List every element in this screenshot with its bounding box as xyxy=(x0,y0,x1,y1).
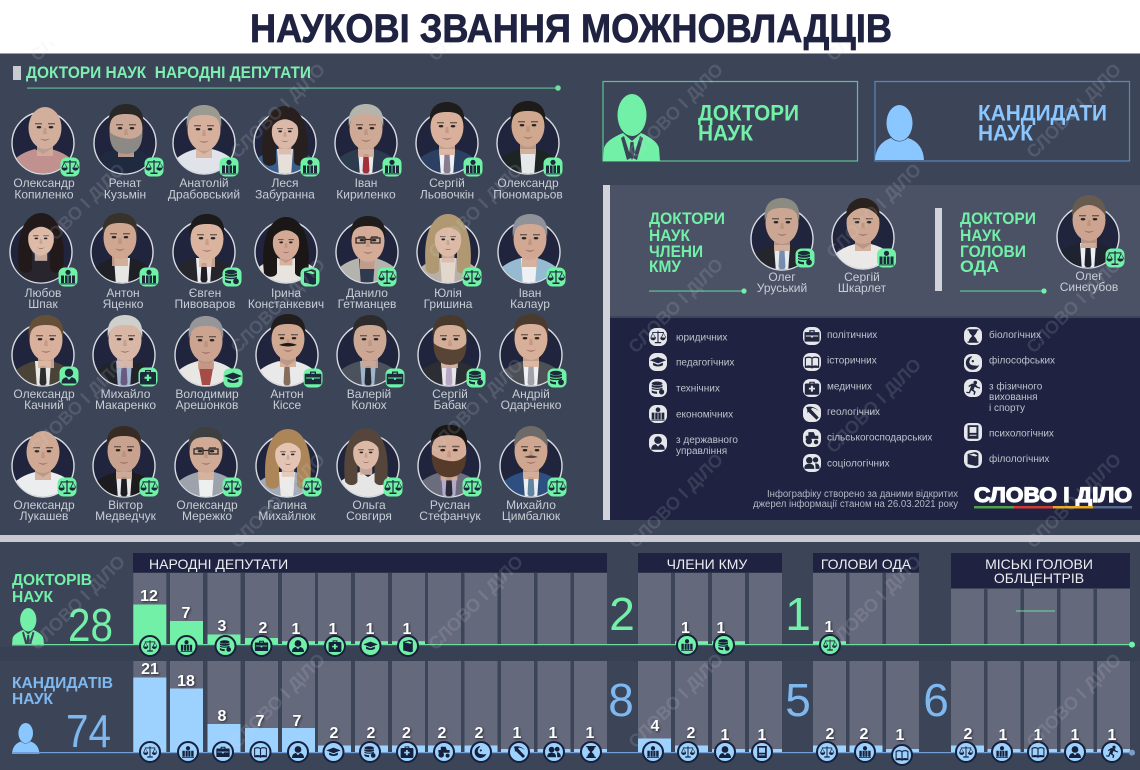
portrait: Совгиря: Ольга xyxy=(352,498,386,512)
heading: доктори наук члени КМУ: ЧЛЕНИ xyxy=(649,242,703,261)
watermarks: СЛОВО І ДІЛО xyxy=(1022,254,1125,357)
portrait: Драбовський xyxy=(168,105,240,202)
green value labels: 1 xyxy=(825,619,834,636)
blue value labels: 1 xyxy=(1108,727,1117,744)
portrait: Уруський: Уруський xyxy=(757,281,807,295)
legend column 3: біологічних xyxy=(989,329,1041,341)
portrait: Совгиря: Совгиря xyxy=(346,509,392,523)
legend column 3: філософських xyxy=(989,354,1055,366)
heading: доктори наук голови ОДА: ДОКТОРИ xyxy=(960,209,1036,228)
portrait: Яценко xyxy=(89,213,158,311)
legend column 2: соціологічних xyxy=(827,458,890,470)
portrait: Забуранна: Леся xyxy=(271,176,299,190)
source note: Інфографіку створено за даними відкритих xyxy=(767,488,958,500)
green value labels: 1 xyxy=(681,620,690,637)
portraits grid: народні депутати xyxy=(8,101,566,523)
portrait: Качний: Олександр xyxy=(13,387,75,401)
watermarks: СЛОВО І ДІЛО xyxy=(424,551,527,654)
chart headers: ГОЛОВИ ОДА xyxy=(821,556,912,572)
portrait: Драбовський: Анатолій xyxy=(179,176,229,190)
legend column 2: політичних xyxy=(827,330,877,341)
portrait: Пономарьов: Олександр xyxy=(497,176,559,190)
blue value labels: 21 xyxy=(141,661,159,678)
portrait: Одарченко: Одарченко xyxy=(501,398,562,412)
blue value labels xyxy=(141,661,1117,744)
watermarks: СЛОВО І ДІЛО xyxy=(226,59,329,162)
portrait: Шпак: Любов xyxy=(25,286,61,300)
green value labels: 12 xyxy=(140,588,158,605)
portrait: Медведчук: Віктор xyxy=(108,498,143,512)
blue icons xyxy=(140,742,1122,765)
watermarks: СЛОВО І ДІЛО xyxy=(226,649,329,752)
blue value labels: 7 xyxy=(256,713,265,730)
watermarks: СЛОВО І ДІЛО xyxy=(1022,59,1125,162)
portrait: Кіссе xyxy=(254,314,322,412)
blue value labels: 2 xyxy=(964,726,973,743)
blue value labels: 2 xyxy=(402,725,411,742)
portrait: Уруський: Олег xyxy=(768,270,796,284)
legend column 1: економічних xyxy=(676,410,733,420)
heading: доктори наук голови ОДА xyxy=(960,209,1036,276)
heading: доктори наук члени КМУ: ДОКТОРИ xyxy=(649,209,725,228)
portrait: Гришина: Юлія xyxy=(434,286,462,300)
portrait: Макаренко: Макаренко xyxy=(95,398,156,412)
totals: 8, 5 and 6: 8 xyxy=(608,674,634,726)
legend column 3 xyxy=(964,327,1055,468)
legend column 3: з фізичного xyxy=(989,380,1043,392)
heading: доктори наук голови ОДА: НАУК xyxy=(960,226,1002,245)
card: доктори наук: НАУК xyxy=(698,120,754,146)
totals: 2 and 1 xyxy=(609,588,811,640)
green value labels: 3 xyxy=(218,618,227,635)
green value labels: 2 xyxy=(259,620,268,637)
blue value labels: 1 xyxy=(758,727,767,744)
portrait: Колюх: Валерій xyxy=(347,387,391,401)
portrait: Льовочкін: Льовочкін xyxy=(420,188,474,202)
watermarks: СЛОВО І ДІЛО xyxy=(26,551,129,654)
heading: доктори наук члени КМУ: НАУК xyxy=(649,226,691,245)
portrait: Михайлюк xyxy=(254,429,322,523)
portrait: Колюх: Колюх xyxy=(351,398,387,412)
green value labels: 1 xyxy=(717,620,726,637)
chart headers xyxy=(133,553,1130,588)
portrait: Гришина: Гришина xyxy=(424,297,473,311)
chart: доктори наук, значення xyxy=(12,588,1135,656)
row label: кандидатів наук 74: НАУК xyxy=(12,691,53,708)
row label: докторів наук 28: ДОКТОРІВ xyxy=(12,572,92,589)
portrait: Гетманцев xyxy=(334,216,400,311)
portrait: Яценко: Яценко xyxy=(103,297,144,311)
portrait: Медведчук xyxy=(91,426,158,523)
watermarks: СЛОВО І ДІЛО xyxy=(624,59,727,162)
portrait: Гетманцев: Гетманцев xyxy=(338,297,396,311)
portrait: Мережко xyxy=(173,427,242,523)
row label: докторів наук 28 xyxy=(12,572,113,651)
portrait: Арешонков xyxy=(173,316,242,412)
portrait: Михайлюк: Михайлюк xyxy=(258,509,316,523)
title: НАУКОВІ ЗВАННЯ МОЖНОВЛАДЦІВ xyxy=(250,7,892,51)
totals: 8, 5 and 6: 6 xyxy=(923,674,949,726)
portrait: Мережко: Олександр xyxy=(176,498,238,512)
heading: доктори наук члени КМУ: КМУ xyxy=(649,257,681,276)
watermarks: СЛОВО І ДІЛО xyxy=(226,254,329,357)
logo: Слово і Діло: СЛОВО І ДІЛО xyxy=(974,484,1132,507)
portrait: Забуранна xyxy=(252,106,320,202)
green icons xyxy=(140,635,840,656)
chart headers: МІСЬКІ ГОЛОВИ xyxy=(985,556,1093,572)
portrait: Констанкевич: Констанкевич xyxy=(248,297,324,311)
portrait: Забуранна: Забуранна xyxy=(255,188,315,202)
portrait: Макаренко: Михайло xyxy=(101,387,151,401)
blue value bars xyxy=(133,678,1130,752)
divider xyxy=(0,535,1140,542)
portrait: Стефанчук: Руслан xyxy=(430,498,470,512)
legend column 3: виховання xyxy=(989,392,1038,403)
watermarks: СЛОВО І ДІЛО xyxy=(624,649,727,752)
legend column 2: медичних xyxy=(827,382,872,392)
portrait: Лукашев: Лукашев xyxy=(20,509,68,523)
portrait: Шкарлет: Сергій xyxy=(844,270,880,284)
portrait: Медведчук: Медведчук xyxy=(95,509,157,523)
blue value labels: 1 xyxy=(513,725,522,742)
blue value labels: 2 xyxy=(330,725,339,742)
legend column 3: і спорту xyxy=(989,403,1025,414)
green value labels: 1 xyxy=(292,621,301,638)
legend column 1: педагогічних xyxy=(676,358,734,368)
portrait: Кіссе: Антон xyxy=(270,387,304,401)
heading: доктори наук голови ОДА: ОДА xyxy=(960,257,999,276)
blue value labels: 1 xyxy=(549,725,558,742)
portrait: Гетманцев: Данило xyxy=(346,286,388,300)
blue value labels: 4 xyxy=(651,718,660,735)
legend column 1: управління xyxy=(676,446,727,457)
portrait: Копиленко: Копиленко xyxy=(14,188,74,202)
portrait: Кузьмін: Ренат xyxy=(109,176,142,190)
blue value labels: 2 xyxy=(475,725,484,742)
blue value labels: 1 xyxy=(896,727,905,744)
heading: доктори наук голови ОДА: ГОЛОВИ xyxy=(960,242,1026,261)
portrait: Драбовський: Драбовський xyxy=(168,188,240,202)
portrait: Пономарьов: Пономарьов xyxy=(493,188,563,202)
card: кандидати наук: КАНДИДАТИ xyxy=(978,100,1107,126)
portrait: Кіссе: Кіссе xyxy=(273,398,301,412)
row label: докторів наук 28: НАУК xyxy=(12,589,53,606)
blue value labels: 2 xyxy=(826,726,835,743)
card: доктори наук xyxy=(603,82,858,161)
legend column 3: філологічних xyxy=(989,453,1049,465)
portrait: Кириленко: Кириленко xyxy=(336,188,396,202)
watermarks: СЛОВО І ДІЛО xyxy=(624,254,727,357)
portrait: Пивоваров: Євген xyxy=(189,286,221,300)
portrait: Лукашев: Олександр xyxy=(13,498,75,512)
chart headers: ОБЛЦЕНТРІВ xyxy=(994,570,1084,586)
card: доктори наук: ДОКТОРИ xyxy=(698,100,799,126)
green value labels xyxy=(140,588,834,638)
blue value labels: 1 xyxy=(586,725,595,742)
section heading: доктори наук, народні депутати: ДОКТОРИ НАУК НАРОДНІ ДЕПУТАТИ xyxy=(26,63,311,82)
legend column 2 xyxy=(803,327,932,472)
green value labels: 1 xyxy=(403,621,412,638)
watermarks: СЛОВО І ДІЛО xyxy=(624,449,727,552)
portrait: Калаур: Калаур xyxy=(510,297,550,311)
portrait: Одарченко: Андрій xyxy=(512,387,550,401)
legend column 1 xyxy=(649,328,738,457)
portrait: Синєгубов xyxy=(1055,195,1124,294)
legend column 2: сільськогосподарських xyxy=(827,432,932,444)
blue value labels: 2 xyxy=(687,725,696,742)
legend column 1: з державного xyxy=(676,435,738,446)
watermarks: СЛОВО І ДІЛО xyxy=(1022,649,1125,752)
watermarks: СЛОВО І ДІЛО xyxy=(226,449,329,552)
green value labels: 7 xyxy=(182,605,191,622)
green value labels: 1 xyxy=(366,621,375,638)
legend column 2: геологічних xyxy=(827,407,880,418)
watermarks: СЛОВО І ДІЛО xyxy=(822,159,925,262)
watermarks: СЛОВО І ДІЛО xyxy=(822,551,925,654)
totals: 2 and 1: 2 xyxy=(609,588,635,640)
portrait: Бабак xyxy=(416,315,486,412)
portrait: Калаур xyxy=(496,214,566,311)
watermarks: СЛОВО І ДІЛО xyxy=(424,159,527,262)
portrait: Цимбалюк: Цимбалюк xyxy=(502,509,561,523)
portrait: Одарченко xyxy=(498,314,566,412)
portrait: Михайлюк: Галина xyxy=(267,498,307,512)
row label: кандидатів наук 74 xyxy=(12,675,113,757)
portrait: Шкарлет xyxy=(830,198,896,295)
blue value labels: 1 xyxy=(721,727,730,744)
portrait: Копиленко: Олександр xyxy=(13,176,75,190)
portrait: Арешонков: Володимир xyxy=(175,387,239,401)
panel: члени КМУ і голови ОДА xyxy=(603,185,1140,520)
portrait: Кузьмін xyxy=(92,104,164,202)
chart: кандидати наук, значення xyxy=(12,661,1135,765)
green baseline xyxy=(12,642,1135,648)
blue value labels: 8 xyxy=(218,708,227,725)
portrait: Калаур: Іван xyxy=(519,286,541,300)
portrait: Уруський xyxy=(749,198,815,295)
portrait: Шпак xyxy=(8,213,78,311)
watermarks: СЛОВО І ДІЛО xyxy=(26,354,129,457)
blue value labels: 7 xyxy=(293,713,302,730)
portrait: Кириленко xyxy=(333,104,402,202)
portrait: Синєгубов: Олег xyxy=(1075,269,1103,283)
blue value labels: 1 xyxy=(999,727,1008,744)
portrait: Кириленко: Іван xyxy=(355,176,377,190)
portrait: Констанкевич: Ірина xyxy=(271,286,301,300)
panel: legend xyxy=(610,318,1140,520)
portrait: Стефанчук xyxy=(416,425,482,523)
watermarks: СЛОВО І ДІЛО xyxy=(424,354,527,457)
portrait: Гришина xyxy=(415,214,482,311)
legend column 1: юридичних xyxy=(676,332,727,344)
row label: кандидатів наук 74: КАНДИДАТІВ xyxy=(12,675,113,692)
green value bars xyxy=(133,604,846,644)
portrait: Шкарлет: Шкарлет xyxy=(838,281,887,295)
portrait: Бабак: Сергій xyxy=(432,387,468,401)
totals: 8, 5 and 6: 5 xyxy=(785,674,811,726)
legend column 2: історичних xyxy=(827,356,877,366)
header rule xyxy=(0,53,1140,54)
portrait: Колюх xyxy=(335,315,404,412)
blue value labels: 2 xyxy=(438,725,447,742)
watermarks: СЛОВО І ДІЛО xyxy=(26,159,129,262)
blue value labels: 2 xyxy=(860,726,869,743)
portrait: Цимбалюк: Михайло xyxy=(506,498,556,512)
portrait: Яценко: Антон xyxy=(106,286,140,300)
portrait: Мережко: Мережко xyxy=(182,509,232,523)
source note: джерел інформації станом на 26.03.2021 року xyxy=(753,498,958,510)
portrait: Качний: Качний xyxy=(24,398,64,412)
portrait: Пивоваров xyxy=(171,214,242,311)
portrait: Лукашев xyxy=(10,431,76,523)
portrait: Арешонков: Арешонков xyxy=(176,398,238,412)
portrait: Льовочкін xyxy=(414,102,482,202)
chart headers: НАРОДНІ ДЕПУТАТИ xyxy=(149,556,288,572)
portrait: Льовочкін: Сергій xyxy=(429,176,465,190)
blue value labels: 1 xyxy=(1071,727,1080,744)
card: кандидати наук xyxy=(875,82,1130,161)
section heading: доктори наук, народні депутати xyxy=(13,63,561,91)
portrait: Копиленко xyxy=(10,107,80,202)
card: кандидати наук: НАУК xyxy=(978,120,1034,146)
blue value labels: 1 xyxy=(1034,727,1043,744)
green value labels: 1 xyxy=(329,621,338,638)
blue value labels: 2 xyxy=(367,725,376,742)
header band xyxy=(0,0,1140,53)
totals: 2 and 1: 1 xyxy=(785,588,811,640)
portrait: Констанкевич xyxy=(248,217,324,311)
portrait: Пивоваров: Пивоваров xyxy=(175,297,235,311)
portrait: Стефанчук: Стефанчук xyxy=(419,509,481,523)
portrait: Пономарьов xyxy=(493,101,563,202)
chart background bars xyxy=(133,573,1130,752)
watermarks: СЛОВО І ДІЛО xyxy=(1022,449,1125,552)
portrait: Совгиря xyxy=(335,428,402,523)
portrait: Цимбалюк xyxy=(498,426,566,523)
portrait: Качний xyxy=(10,315,78,412)
blue value labels: 18 xyxy=(177,673,195,690)
portrait: Бабак: Бабак xyxy=(433,398,467,412)
portrait: Синєгубов: Синєгубов xyxy=(1060,280,1118,294)
source note xyxy=(753,488,958,510)
row label: докторів наук 28: 28 xyxy=(68,599,113,651)
portrait: Шпак: Шпак xyxy=(28,297,58,311)
portrait: Макаренко xyxy=(91,315,158,412)
portrait: Кузьмін: Кузьмін xyxy=(104,188,146,202)
legend column 1: технічних xyxy=(676,384,720,394)
row label: кандидатів наук 74: 74 xyxy=(66,705,111,757)
blue baseline xyxy=(12,750,1135,756)
legend column 3: психологічних xyxy=(989,428,1054,440)
totals: 8, 5 and 6 xyxy=(608,674,949,726)
chart headers: ЧЛЕНИ КМУ xyxy=(667,556,747,572)
watermarks: СЛОВО І ДІЛО xyxy=(822,354,925,457)
heading: доктори наук члени КМУ xyxy=(649,209,725,276)
